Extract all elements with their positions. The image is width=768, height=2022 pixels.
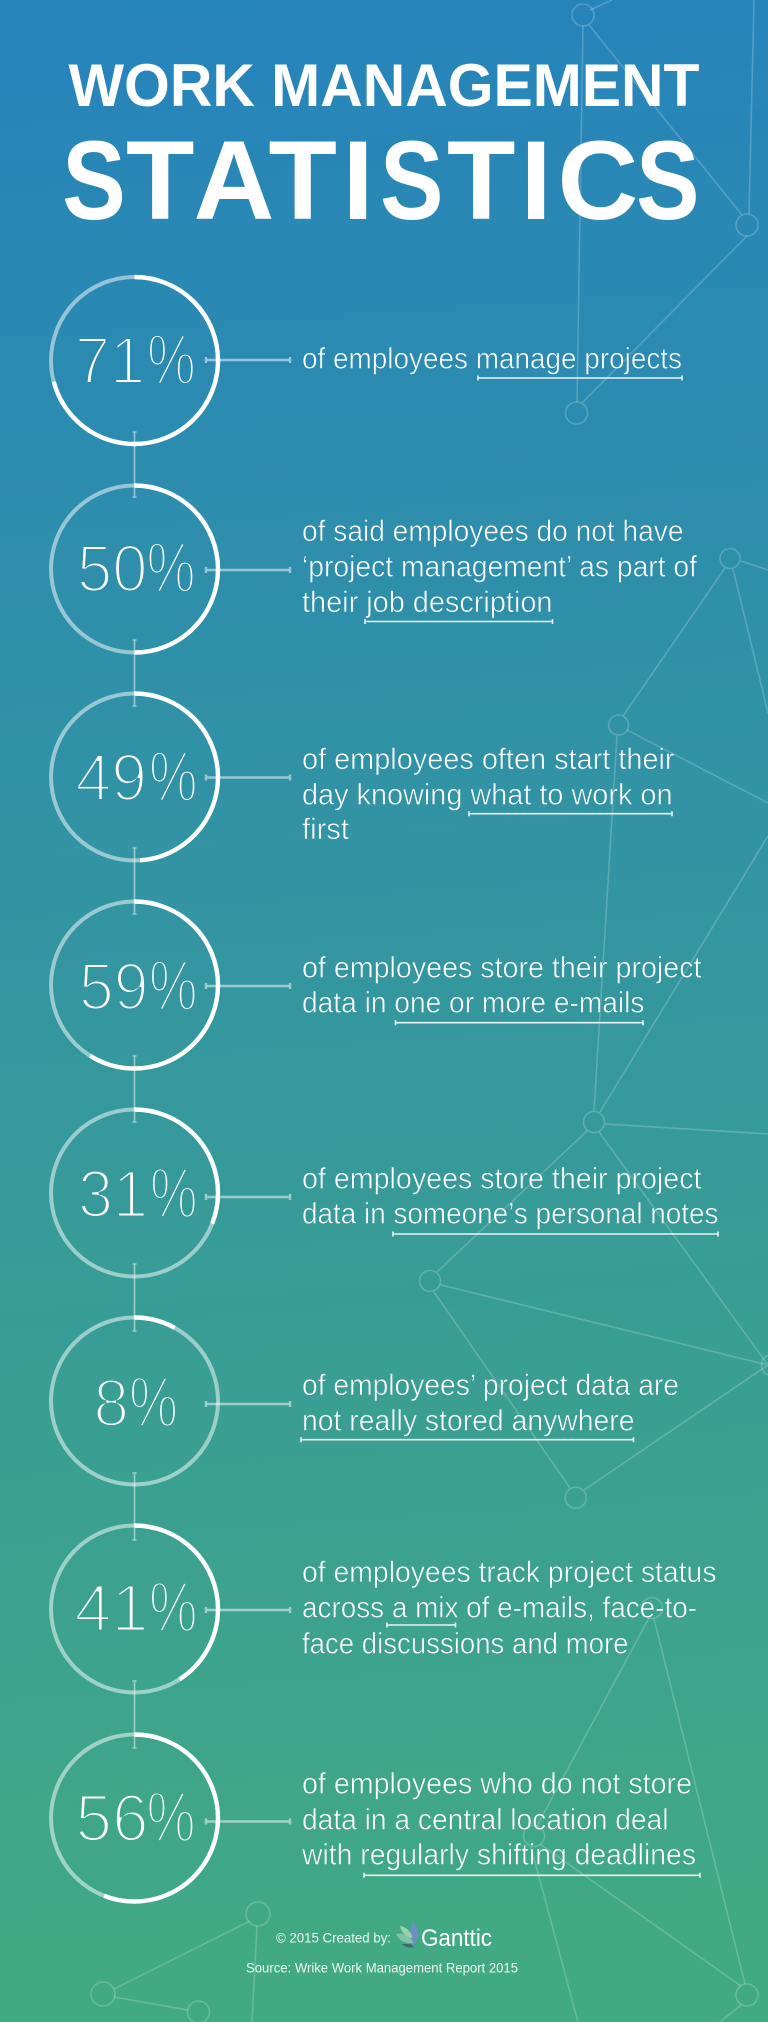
number 49%: 49 (76, 740, 147, 816)
vertical connector 5 (132, 1264, 136, 1331)
description: of employees track project status (302, 1556, 716, 1589)
number 56% (76, 1778, 196, 1858)
number 31%: % (150, 1154, 198, 1234)
underline (301, 1437, 634, 1442)
stat 56% (51, 1734, 700, 1902)
description (301, 1767, 696, 1871)
number 41%: 41 (74, 1571, 148, 1646)
horizontal connector (206, 1607, 290, 1613)
vertical connector 1 (132, 432, 136, 497)
number 71%: 71 (75, 324, 145, 398)
description: of employees store their project (302, 952, 702, 984)
progress ring 31% (51, 1110, 218, 1276)
icon: Ganttic logo (396, 1921, 418, 1948)
number 59%: 59 (79, 950, 148, 1024)
description: face discussions and more (302, 1627, 628, 1660)
stat 59% (51, 902, 702, 1068)
description: not really stored anywhere (302, 1405, 634, 1438)
number 50%: % (146, 529, 196, 608)
underline (478, 376, 682, 380)
description: of employees manage projects (302, 342, 682, 376)
horizontal connector (206, 983, 290, 989)
horizontal connector (206, 774, 290, 780)
stat 71% (51, 277, 682, 444)
number 71% (75, 321, 196, 400)
vertical connector 3 (132, 848, 136, 914)
progress ring 50% (51, 486, 218, 652)
title line 2: S (62, 118, 126, 243)
title line 2: S (380, 118, 444, 243)
description (302, 515, 698, 619)
progress ring 41% (51, 1526, 218, 1692)
description (302, 1369, 679, 1438)
description: data in one or more e-mails (302, 987, 644, 1020)
number 56%: % (146, 1778, 196, 1858)
description: ‘project management’ as part of (302, 550, 698, 584)
description (302, 743, 674, 846)
title line 2: TIC (447, 118, 638, 243)
logo wordmark: Ganttic (421, 1925, 492, 1952)
title line 2: S (636, 118, 700, 243)
description (302, 1162, 718, 1230)
stat 49% (51, 694, 674, 860)
description: of employees store their project (302, 1162, 702, 1195)
description: of said employees do not have (302, 515, 684, 548)
vertical connector 4 (132, 1056, 136, 1122)
title (62, 52, 699, 243)
underline (396, 1020, 643, 1025)
number 59% (79, 947, 198, 1026)
number 50% (77, 529, 196, 608)
number 8%: % (129, 1364, 178, 1442)
horizontal connector (206, 1818, 290, 1824)
footer credit (276, 1921, 492, 1952)
vertical connector 6 (132, 1473, 136, 1540)
description (302, 952, 702, 1020)
description: day knowing what to work on (302, 778, 672, 812)
number 49% (76, 738, 198, 817)
title line 2: TATI (126, 118, 374, 243)
number 31%: 31 (78, 1157, 148, 1232)
stat 31% (51, 1110, 718, 1276)
horizontal connector (206, 567, 290, 573)
progress ring 71% (51, 277, 218, 444)
number 71%: % (147, 321, 196, 400)
progress ring 49% (51, 694, 218, 860)
number 41%: % (149, 1568, 198, 1648)
underline (469, 811, 672, 816)
number 8%: 8 (94, 1366, 129, 1441)
stat 8% (51, 1318, 679, 1484)
vertical connector 2 (132, 640, 136, 706)
progress ring 59% (51, 902, 218, 1068)
number 50%: 50 (77, 532, 148, 606)
description: of employees who do not store (302, 1767, 692, 1800)
description: their job description (302, 586, 552, 619)
progress ring 8% (51, 1318, 218, 1484)
underline (364, 1873, 700, 1878)
description: first (302, 813, 350, 846)
horizontal connector (206, 1401, 290, 1407)
description: data in someone’s personal notes (302, 1197, 718, 1230)
underline (387, 1622, 456, 1628)
stat 50% (51, 486, 698, 652)
progress ring 56% (51, 1734, 218, 1902)
stat 41% (51, 1526, 716, 1692)
description: of employees often start their (302, 743, 674, 776)
description: across a mix of e-mails, face-to- (302, 1591, 697, 1624)
description (302, 1556, 716, 1660)
number 41% (74, 1568, 198, 1648)
number 59%: % (149, 947, 198, 1026)
vertical connector 7 (132, 1681, 136, 1748)
underline (365, 619, 552, 624)
title line 2 (62, 118, 699, 243)
source line: Source: Wrike Work Management Report 2015 (246, 1960, 518, 1976)
number 8% (94, 1364, 178, 1442)
created by text: © 2015 Created by: (276, 1930, 391, 1946)
number 56%: 56 (76, 1781, 148, 1856)
horizontal connector (206, 357, 290, 363)
number 49%: % (149, 738, 198, 817)
underline (393, 1232, 718, 1236)
title line 1: WORK MANAGEMENT (68, 52, 700, 119)
description: of employees’ project data are (302, 1369, 679, 1402)
description: data in a central location deal (302, 1803, 668, 1836)
number 31% (78, 1154, 198, 1234)
description: with regularly shifting deadlines (301, 1838, 696, 1871)
horizontal connector (206, 1194, 290, 1200)
